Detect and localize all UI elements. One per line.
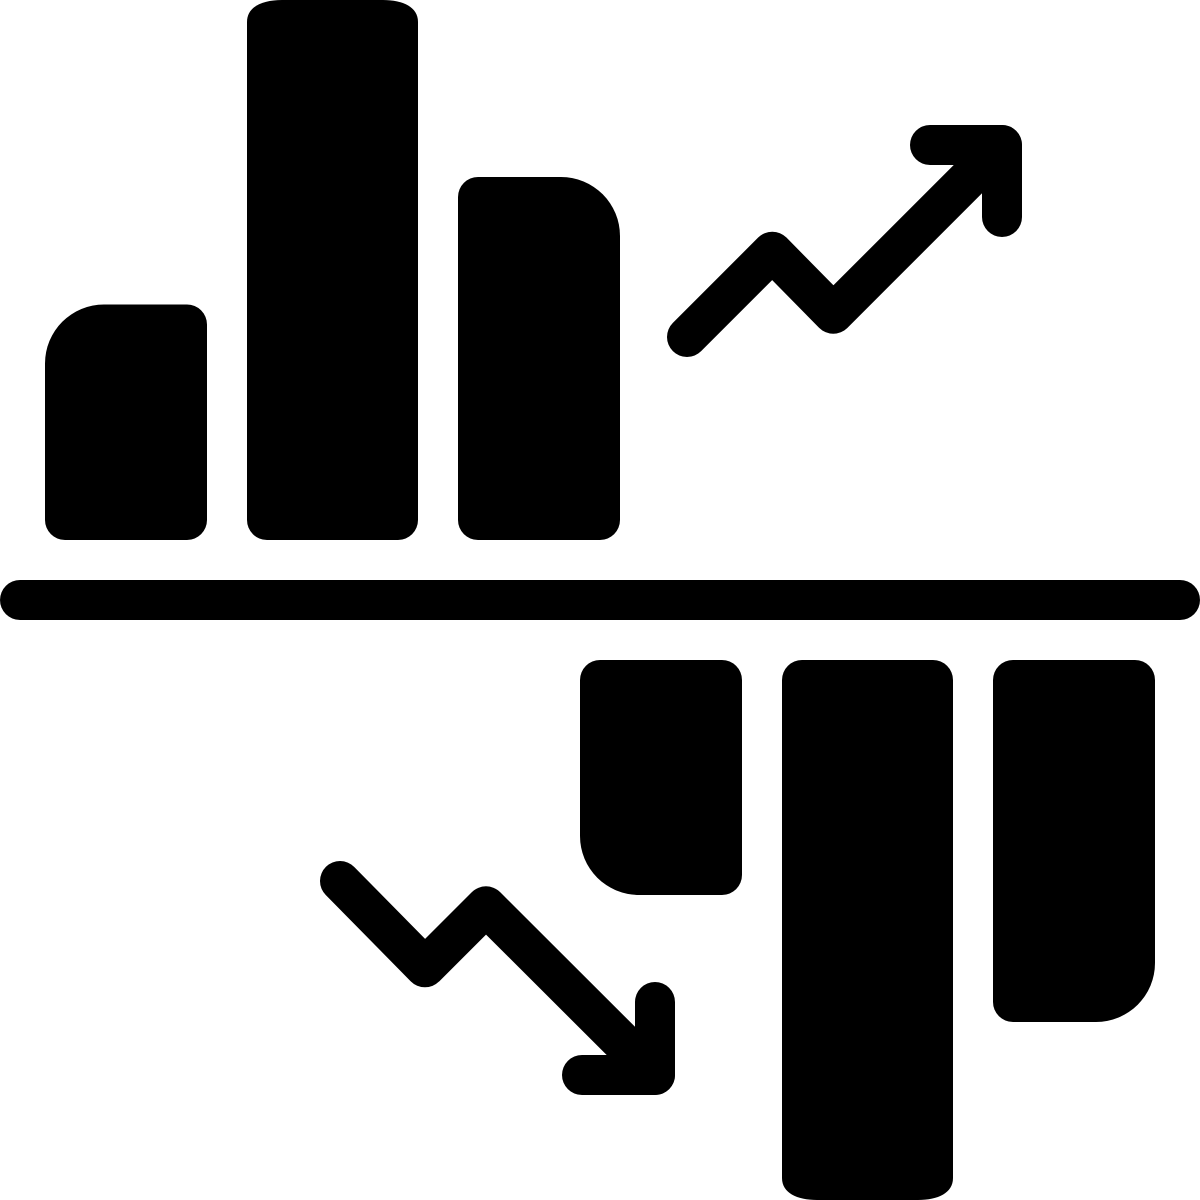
up trend arrow bbox=[687, 145, 1002, 337]
upper bars bbox=[45, 0, 620, 540]
lower bars bbox=[580, 660, 1155, 1200]
down trend arrow bbox=[340, 881, 655, 1075]
divider line bbox=[0, 580, 1200, 620]
